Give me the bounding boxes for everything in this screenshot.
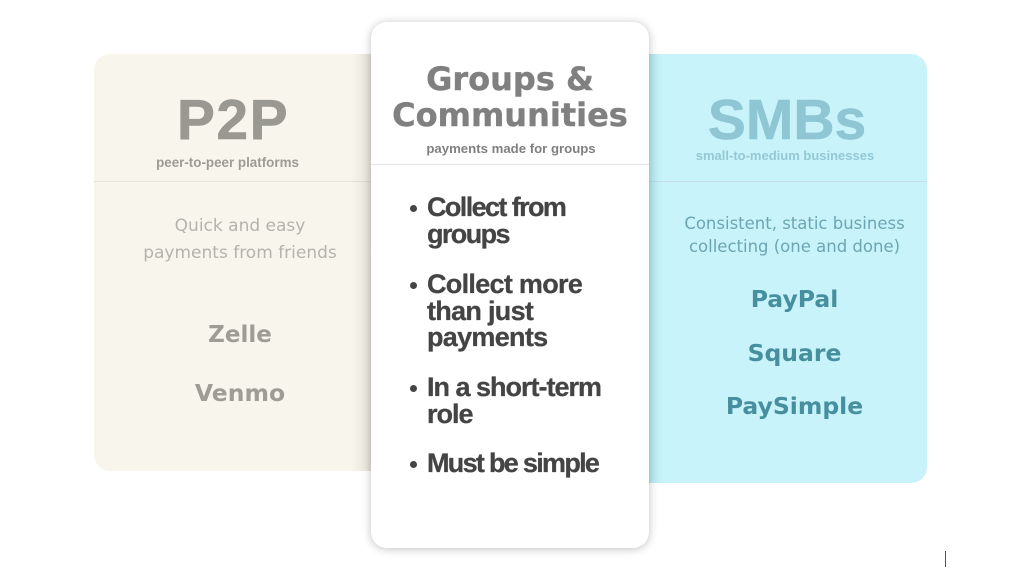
heading: Groups & Communities	[392, 60, 628, 134]
subheading: payments made for groups: payments made for groups	[426, 141, 596, 156]
description: P2P: Quick and easy	[175, 216, 305, 236]
bullet: Collect from groups: groups	[427, 218, 509, 248]
heading: Groups & Communities: Communities	[392, 96, 628, 134]
bullet: In a short-term role: In a short-term	[427, 372, 601, 402]
cursor mark	[945, 551, 946, 567]
heading: Groups & Communities: Groups &	[426, 60, 594, 98]
bullet: Collect more than just payments: Collect more	[427, 269, 582, 299]
bullet: Collect from groups: Collect from	[427, 192, 565, 222]
description: P2P: payments from friends	[143, 243, 337, 263]
description: SMBs: Consistent, static business	[684, 214, 905, 233]
provider: Square: Square	[748, 339, 841, 367]
panel: Groups & Communities	[371, 22, 649, 548]
provider: PaySimple: PaySimple	[726, 392, 863, 420]
bullet: In a short-term role: role	[427, 398, 473, 428]
provider: Zelle: Zelle	[208, 322, 272, 348]
bullet: Collect more than just payments: than just	[427, 296, 533, 326]
provider: PayPal: PayPal	[751, 285, 838, 313]
subheading: peer-to-peer platforms: peer-to-peer platforms	[156, 155, 299, 170]
description: SMBs: collecting (one and done)	[689, 237, 900, 256]
subheading: small-to-medium businesses: small-to-medium businesses	[696, 148, 874, 163]
bullet list	[410, 192, 601, 478]
heading: SMBs: SMBs	[708, 88, 866, 152]
provider: Venmo: Venmo	[195, 379, 285, 407]
heading: P2P: P2P	[177, 88, 289, 152]
panel: P2P	[94, 54, 372, 471]
description: SMBs	[684, 214, 905, 256]
bullet: Collect more than just payments	[427, 269, 582, 352]
bullet: Must be simple: Must be simple	[427, 448, 598, 478]
panel: SMBs	[648, 54, 927, 483]
bullet: Collect from groups	[427, 192, 566, 249]
bullet: In a short-term role	[427, 372, 601, 428]
description: P2P	[143, 216, 337, 263]
bullet: Collect more than just payments: payments	[427, 322, 547, 352]
